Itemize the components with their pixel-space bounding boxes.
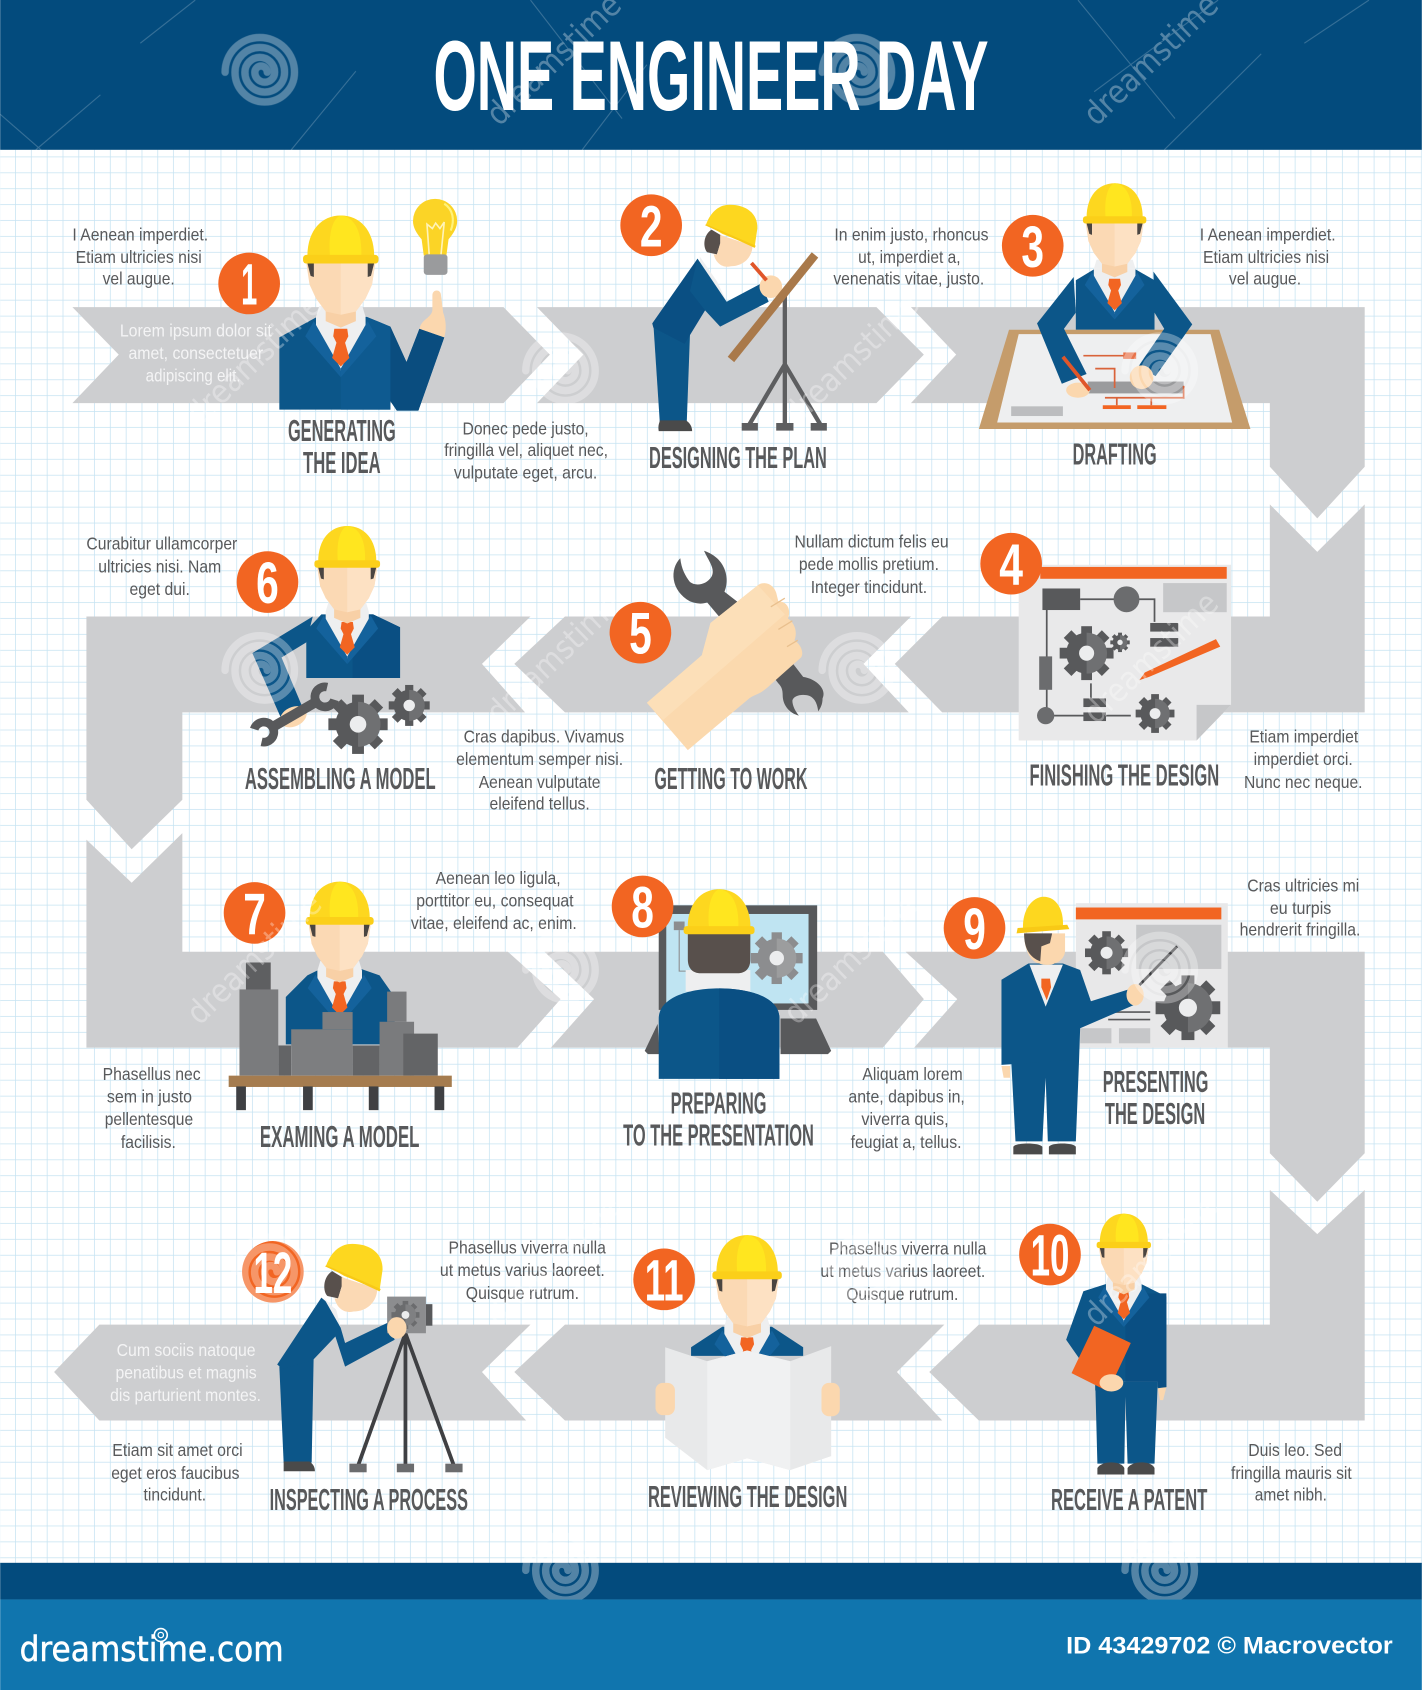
text block 7b: facilisis. bbox=[121, 1132, 176, 1152]
text block 5b: eleifend tellus. bbox=[490, 793, 590, 813]
heading 1: THE IDEA bbox=[303, 447, 381, 480]
badge 6: 6 bbox=[256, 551, 279, 616]
text block 6 bbox=[86, 534, 238, 599]
title: ONE ENGINEER DAY bbox=[433, 21, 989, 132]
text block 12: Phasellus viverra nulla bbox=[449, 1237, 606, 1257]
text on arrow 12: dis parturient montes. bbox=[110, 1385, 261, 1405]
badge 1 bbox=[218, 252, 280, 317]
process ribbon arrows bbox=[54, 307, 1365, 1421]
arrow 6 turning down bbox=[86, 617, 530, 849]
tripod bbox=[349, 1333, 463, 1472]
heading 4: FINISHING THE DESIGN bbox=[1029, 760, 1219, 793]
watermark overlay: dreamstime bbox=[478, 1186, 629, 1334]
text block 6: ultricies nisi. Nam bbox=[98, 556, 221, 576]
text block 11 bbox=[820, 1239, 987, 1304]
text block 1b: fringilla vel, aliquet nec, bbox=[444, 440, 608, 460]
arrow 3 turning down bbox=[911, 307, 1365, 518]
drafting table bbox=[979, 330, 1250, 429]
badge 11: 11 bbox=[645, 1248, 684, 1313]
text block 1: Etiam ultricies nisi bbox=[76, 247, 202, 267]
heading 10: RECEIVE A PATENT bbox=[1051, 1484, 1208, 1517]
arrow 5 bbox=[514, 617, 911, 712]
arrow 1 bbox=[72, 307, 550, 403]
text on arrow 12: penatibus et magnis bbox=[116, 1363, 257, 1383]
text block 1 bbox=[72, 224, 208, 289]
text on arrow 1: amet, consectetuer bbox=[128, 343, 263, 363]
text block 12b: Etiam sit amet orci bbox=[112, 1440, 243, 1460]
text block 1: I Aenean imperdiet. bbox=[72, 224, 208, 244]
text on arrow 12: Cum sociis natoque bbox=[117, 1340, 256, 1360]
easel board bbox=[728, 252, 818, 362]
heading 8 bbox=[623, 1087, 814, 1153]
text block 2: venenatis vitae, justo. bbox=[833, 269, 984, 289]
text on arrow 12 bbox=[110, 1340, 261, 1405]
text block 5b: Cras dapibus. Vivamus bbox=[464, 727, 624, 747]
text block 10: fringilla mauris sit bbox=[1231, 1463, 1352, 1483]
icon: gears bbox=[328, 685, 430, 754]
text block 2: In enim justo, rhoncus bbox=[834, 224, 989, 244]
engineer with camera bbox=[277, 1244, 432, 1471]
heading 5: GETTING TO WORK bbox=[654, 763, 808, 796]
text block 12: ut metus varius laoreet. bbox=[440, 1260, 605, 1280]
engineer bust bbox=[286, 882, 395, 1044]
heading 9: THE DESIGN bbox=[1105, 1098, 1205, 1131]
text block 3: I Aenean imperdiet. bbox=[1200, 224, 1336, 244]
text block 7 bbox=[411, 868, 577, 933]
text block 12b: tincidunt. bbox=[144, 1484, 206, 1504]
text block 5b: Aenean vulputate bbox=[479, 772, 601, 792]
arrow 8 bbox=[544, 952, 924, 1048]
text block 1b: vulputate eget, arcu. bbox=[454, 463, 597, 483]
text block 5 bbox=[795, 532, 949, 597]
text block 1: vel augue. bbox=[103, 269, 175, 289]
table bbox=[229, 1076, 452, 1110]
heading 12: INSPECTING A PROCESS bbox=[270, 1484, 468, 1517]
engineer with folder bbox=[1066, 1214, 1166, 1474]
text block 7: vitae, eleifend ac, enim. bbox=[411, 913, 577, 933]
text block 8: ante, dapibus in, bbox=[848, 1087, 965, 1107]
arrow 7 turning right bbox=[86, 833, 561, 1048]
dark footer band bbox=[0, 1563, 1422, 1599]
text block 12 bbox=[440, 1237, 606, 1303]
step 10: receive a patent bbox=[1019, 1214, 1352, 1517]
badge 10 bbox=[1019, 1224, 1081, 1289]
text block 7: porttitor eu, consequat bbox=[416, 890, 574, 910]
watermark overlay: dreamstime bbox=[776, 285, 926, 433]
step 5: getting to work bbox=[456, 532, 949, 813]
heading 8: PREPARING bbox=[671, 1087, 767, 1120]
icon: hand bbox=[647, 583, 802, 750]
badge 5 bbox=[610, 602, 671, 667]
heading 1: GENERATING bbox=[288, 415, 396, 448]
text block 8: viverra quis, bbox=[861, 1109, 949, 1129]
watermark overlay: dreamstime bbox=[776, 885, 926, 1032]
badge 8 bbox=[612, 875, 673, 940]
heading 1 bbox=[288, 415, 396, 480]
presentation board bbox=[1076, 903, 1228, 1048]
text block 11: ut metus varius laoreet. bbox=[820, 1261, 985, 1281]
heading 7: EXAMING A MODEL bbox=[260, 1121, 419, 1154]
badge 12: 12 bbox=[253, 1241, 292, 1306]
text block 10: amet nibh. bbox=[1255, 1484, 1327, 1504]
text on arrow 1 bbox=[120, 320, 272, 386]
heading 6: ASSEMBLING A MODEL bbox=[245, 763, 436, 796]
text block 7b: pellentesque bbox=[105, 1109, 193, 1129]
step 11: reviewing the design bbox=[633, 1235, 987, 1514]
text block 5: Nullam dictum felis eu bbox=[795, 532, 949, 552]
heading 9: PRESENTING bbox=[1103, 1066, 1208, 1099]
header band bbox=[0, 0, 1422, 150]
step 1: generating the idea bbox=[72, 199, 608, 483]
badge 6 bbox=[237, 551, 298, 616]
step 12: inspecting a process bbox=[110, 1237, 606, 1517]
open map bbox=[655, 1346, 840, 1470]
text block 12b bbox=[111, 1440, 243, 1504]
badge 7 bbox=[224, 882, 285, 947]
easel stand bbox=[742, 293, 827, 427]
watermark overlay: dreamstime bbox=[1075, 584, 1226, 731]
text block 9: eu turpis bbox=[1270, 898, 1331, 918]
text block 3 bbox=[1200, 224, 1336, 289]
engineer from behind bbox=[659, 889, 779, 1079]
text block 9: Cras ultricies mi bbox=[1247, 875, 1359, 895]
building model bbox=[239, 962, 438, 1076]
text block 2: ut, imperdiet a, bbox=[858, 247, 961, 267]
badge 1: 1 bbox=[241, 252, 257, 317]
badge 4 bbox=[980, 533, 1042, 598]
text on arrow 1: Lorem ipsum dolor sit bbox=[120, 320, 272, 340]
badge 7: 7 bbox=[243, 882, 266, 947]
footer band bbox=[0, 1599, 1422, 1690]
badge 12 bbox=[242, 1241, 304, 1306]
badge 10: 10 bbox=[1031, 1224, 1069, 1289]
footer image id: ID 43429702 © Macrovector bbox=[1066, 1633, 1393, 1659]
step 9: presenting the design bbox=[944, 875, 1360, 1154]
step 4: finishing the design bbox=[980, 533, 1363, 793]
heading 11: REVIEWING THE DESIGN bbox=[648, 1481, 847, 1514]
text block 11: Quisque rutrum. bbox=[846, 1284, 958, 1304]
step 6: assembling a model bbox=[86, 526, 436, 796]
text block 5: Integer tincidunt. bbox=[811, 577, 927, 597]
footer logo text: dreamstime.com bbox=[20, 1630, 284, 1670]
step 3: drafting bbox=[979, 183, 1336, 472]
text on arrow 1: adipiscing elit. bbox=[146, 366, 241, 386]
heading 9 bbox=[1103, 1066, 1208, 1131]
text block 12: Quisque rutrum. bbox=[466, 1283, 579, 1303]
engineer leaning bbox=[652, 205, 782, 431]
arrow 2 bbox=[537, 307, 924, 403]
heading 2: DESIGNING THE PLAN bbox=[649, 442, 827, 475]
text block 11: Phasellus viverra nulla bbox=[829, 1239, 987, 1259]
step 8: preparing to the presentation bbox=[612, 875, 965, 1153]
arms and pencil bbox=[1037, 272, 1192, 398]
icon: small wrench bbox=[253, 685, 336, 744]
laptop bbox=[645, 905, 831, 1054]
badge 11 bbox=[633, 1248, 695, 1313]
text block 10: Duis leo. Sed bbox=[1248, 1440, 1342, 1460]
text block 5b bbox=[456, 727, 624, 813]
text block 8 bbox=[848, 1064, 965, 1152]
text block 2 bbox=[833, 224, 989, 289]
text block 8: Aliquam lorem bbox=[862, 1064, 963, 1084]
text block 8: feugiat a, tellus. bbox=[851, 1132, 962, 1152]
arrow 12 bbox=[54, 1325, 530, 1421]
badge 9: 9 bbox=[963, 897, 986, 962]
blueprint sheet bbox=[1019, 565, 1231, 740]
engineer reading map bbox=[691, 1235, 803, 1382]
badge 3: 3 bbox=[1021, 215, 1044, 280]
heading 8: TO THE PRESENTATION bbox=[623, 1120, 814, 1153]
step 2: designing the plan bbox=[620, 194, 989, 475]
text block 5b: elementum semper nisi. bbox=[456, 749, 623, 769]
arrow 10 turning left bbox=[929, 1190, 1365, 1421]
text block 4 bbox=[1244, 727, 1363, 792]
badge 5: 5 bbox=[629, 602, 652, 667]
text block 7: Aenean leo ligula, bbox=[436, 868, 561, 888]
badge 8: 8 bbox=[631, 875, 654, 940]
text block 9 bbox=[1240, 875, 1360, 940]
text block 4: Nunc nec neque. bbox=[1244, 772, 1363, 792]
watermark overlay: dreamstime bbox=[179, 885, 329, 1032]
watermark overlay: dreamstime bbox=[179, 285, 329, 433]
text block 6: Curabitur ullamcorper bbox=[86, 534, 238, 554]
badge 4: 4 bbox=[999, 533, 1023, 598]
text block 4: imperdiet orci. bbox=[1254, 749, 1353, 769]
text block 4: Etiam imperdiet bbox=[1249, 727, 1358, 747]
step 7: examining a model bbox=[103, 868, 577, 1154]
text block 1b: Donec pede justo, bbox=[463, 418, 589, 438]
text block 3: Etiam ultricies nisi bbox=[1203, 247, 1329, 267]
badge 2 bbox=[620, 194, 682, 259]
text block 3: vel augue. bbox=[1229, 269, 1301, 289]
text block 7b: sem in justo bbox=[107, 1087, 192, 1107]
badge 2: 2 bbox=[640, 194, 662, 259]
text block 12b: eget eros faucibus bbox=[111, 1463, 239, 1483]
text block 10 bbox=[1231, 1440, 1352, 1504]
engineer presenting bbox=[1001, 897, 1177, 1154]
text block 9: hendrerit fringilla. bbox=[1240, 920, 1360, 940]
badge 9 bbox=[944, 897, 1005, 962]
text block 1b bbox=[444, 418, 608, 483]
engineer bust with arm bbox=[252, 526, 400, 731]
icon: light bulb bbox=[413, 199, 457, 275]
engineer torso bbox=[1076, 183, 1155, 330]
engineer with raised finger bbox=[279, 216, 446, 411]
text block 6: eget dui. bbox=[130, 579, 190, 599]
arrow 11 bbox=[514, 1325, 944, 1421]
badge 3 bbox=[1002, 215, 1064, 280]
watermark overlay: dreamstime bbox=[478, 584, 629, 731]
text block 7b bbox=[103, 1064, 201, 1152]
arrow 4 turning left bbox=[895, 504, 1365, 712]
text block 7b: Phasellus nec bbox=[103, 1064, 201, 1084]
text block 5: pede mollis pretium. bbox=[799, 554, 939, 574]
heading 3: DRAFTING bbox=[1073, 439, 1157, 472]
icon: wrench bbox=[673, 551, 824, 716]
watermark overlay: dreamstime bbox=[1075, 1186, 1226, 1334]
arrow 9 turning down bbox=[906, 952, 1365, 1202]
